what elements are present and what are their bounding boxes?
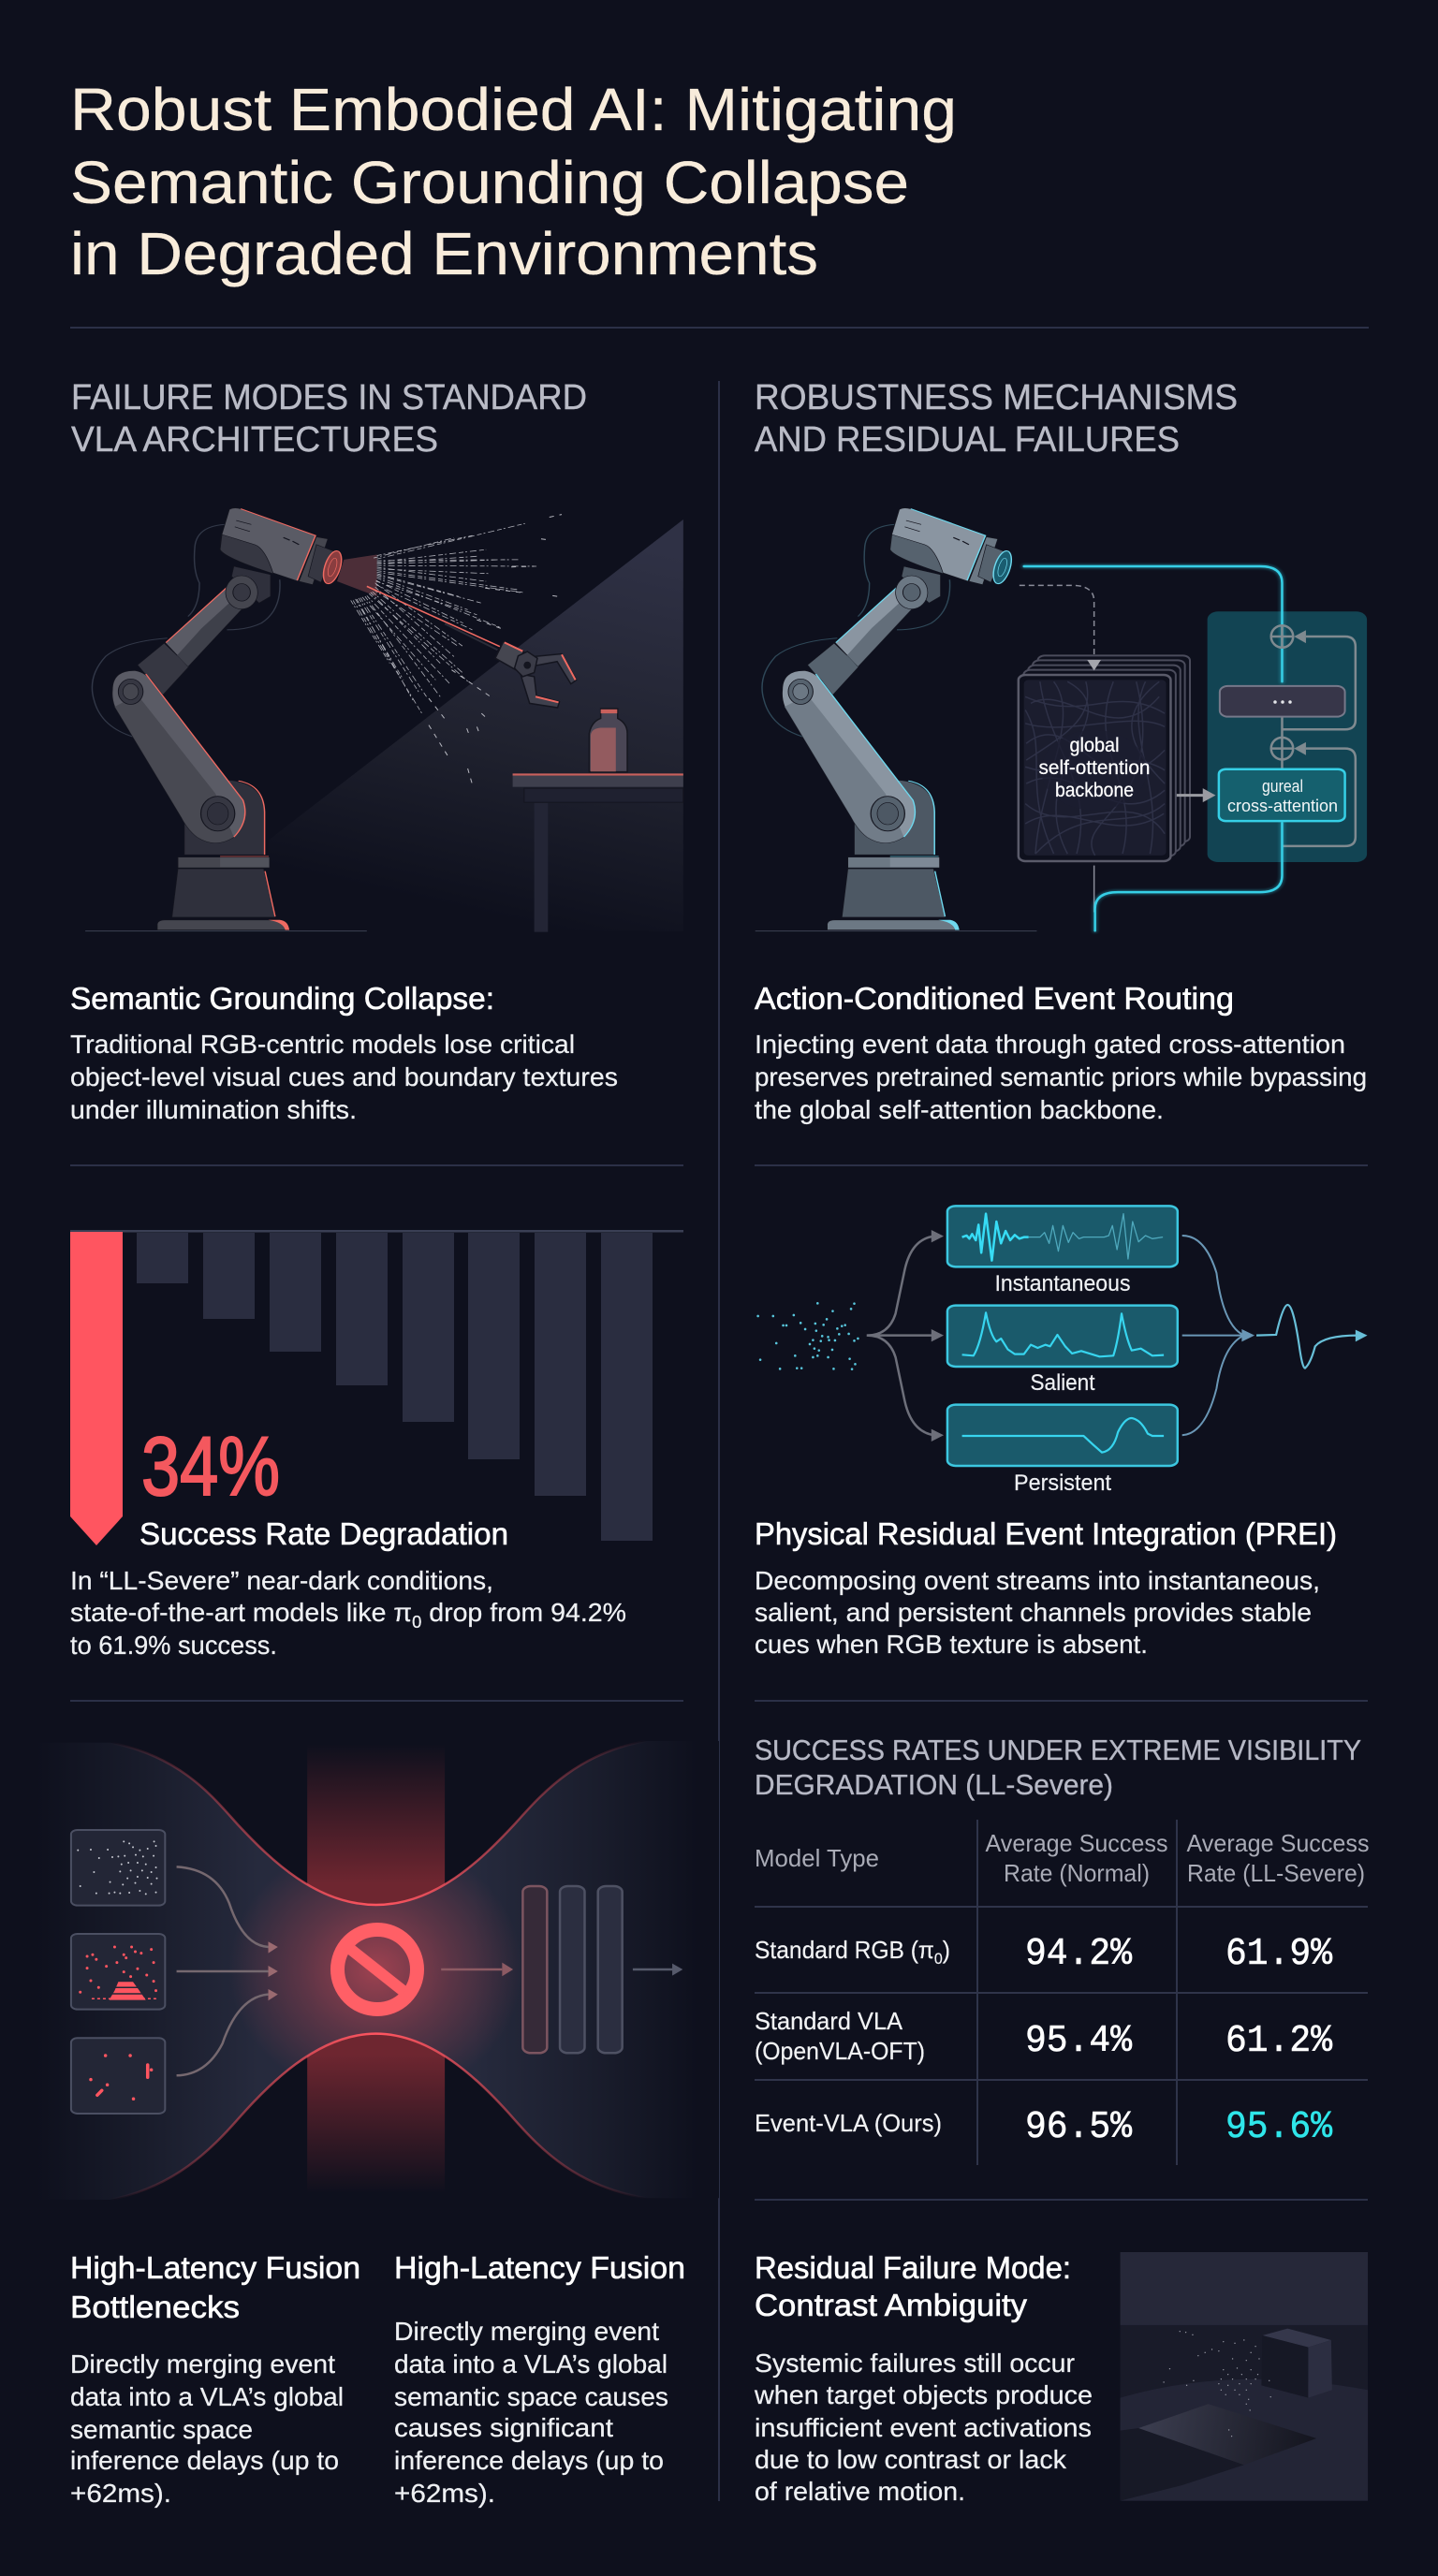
- caption: residual failure mode: Systemic failures still occur: [755, 2349, 1075, 2378]
- table header row: Model Type: [755, 1844, 879, 1872]
- neck shape: [0, 1741, 719, 2200]
- caption: high-latency fusion left: High-Latency Fusion: [70, 2250, 360, 2285]
- title: in Degraded Environments: [70, 220, 818, 287]
- bottle: [589, 709, 627, 772]
- row: standard VLA: Standard VLA: [755, 2007, 903, 2035]
- caption: high-latency fusion right: data into a VLA’s global: [394, 2349, 668, 2378]
- row: standard RGB: [755, 1933, 1332, 1976]
- diagram: event decomposition: [758, 1206, 1368, 1466]
- caption: semantic grounding collapse: [70, 981, 618, 1124]
- table header row: [755, 1829, 1369, 1887]
- red arrow bar: [70, 1232, 123, 1545]
- channel boxes: [947, 1206, 1178, 1466]
- gripper: [495, 641, 577, 708]
- row: event-VLA: 96.5%: [1025, 2106, 1132, 2149]
- panel: failure modes column: [0, 378, 719, 2508]
- caption: residual failure mode: due to low contrast or lack: [755, 2445, 1067, 2474]
- caption: high-latency fusion right: Directly merging event: [394, 2317, 659, 2346]
- caption: success rate degradation: [70, 1516, 626, 1660]
- caption: high-latency fusion left: [70, 2250, 360, 2508]
- faint events: [1164, 2332, 1270, 2437]
- channel labels: Salient: [1030, 1370, 1095, 1396]
- teal gated panel: [1208, 611, 1367, 862]
- caption: action-conditioned event routing: Action-Conditioned Event Routing: [755, 981, 1234, 1016]
- row: standard VLA: 61.2%: [1225, 2020, 1332, 2063]
- caption: residual failure mode: Contrast Ambiguity: [755, 2288, 1028, 2322]
- robot arm: [85, 508, 367, 931]
- caption: PREI: [755, 1516, 1337, 1659]
- arrow: backbone to gate: [1177, 794, 1204, 797]
- icon: blocked sign: [337, 1930, 418, 2009]
- caption: semantic grounding collapse: object-level visual cues and boundary textures: [70, 1062, 618, 1091]
- backbone stack: [1019, 655, 1190, 861]
- input frame: red object events: [71, 1934, 165, 2010]
- row: standard RGB: ): [943, 1936, 950, 1964]
- caption: residual failure mode: when target objects produce: [754, 2380, 1093, 2409]
- gate label: [1227, 776, 1338, 815]
- table heading: [755, 1734, 1361, 1801]
- caption: high-latency fusion left: semantic space: [70, 2415, 253, 2444]
- backbone label: [1039, 735, 1150, 801]
- heading: robustness mechanisms: [755, 378, 1238, 460]
- gate label: cross-attention: [1227, 796, 1338, 815]
- caption: PREI: cues when RGB texture is absent.: [755, 1630, 1148, 1659]
- caption: high-latency fusion left: inference delays (up to: [70, 2446, 339, 2475]
- row: standard RGB: 61.9%: [1225, 1933, 1332, 1976]
- title: [70, 76, 957, 287]
- table: [513, 773, 683, 932]
- caption: success rate degradation: state-of-the-art models like π: [70, 1598, 406, 1627]
- table heading: DEGRADATION (LL-Severe): [755, 1768, 1113, 1801]
- illustration: low-contrast scene: [1121, 2252, 1368, 2501]
- row: standard VLA: 95.4%: [1025, 2020, 1132, 2063]
- caption: success rate degradation: 0: [412, 1613, 421, 1632]
- caption: high-latency fusion left: data into a VLA’s global: [70, 2382, 344, 2411]
- grey degradation bars: [137, 1233, 653, 1541]
- caption: PREI: Physical Residual Event Integration (PREI): [755, 1516, 1337, 1551]
- caption: high-latency fusion right: semantic space causes: [394, 2382, 668, 2411]
- caption: PREI: Decomposing ovent streams into instantaneous,: [755, 1566, 1320, 1595]
- caption: success rate degradation: drop from 94.2%: [421, 1598, 626, 1627]
- caption: semantic grounding collapse: Semantic Grounding Collapse:: [70, 981, 494, 1016]
- caption: high-latency fusion right: causes significant: [394, 2413, 613, 2442]
- channel labels: Persistent: [1014, 1471, 1111, 1496]
- caption: success rate degradation: Success Rate Degradation: [139, 1516, 508, 1551]
- residual feedback lines: [1282, 637, 1356, 846]
- caption: PREI: salient, and persistent channels provides stable: [755, 1598, 1312, 1627]
- caption: high-latency fusion right: +62ms).: [394, 2479, 495, 2508]
- heading: robustness mechanisms: AND RESIDUAL FAILURES: [755, 420, 1180, 460]
- bar chart: success rate degradation: [70, 1230, 683, 1545]
- light cone: [269, 520, 683, 931]
- ellipsis dots: [1275, 700, 1290, 704]
- grey output line: [1093, 866, 1095, 913]
- table header row: Average Success: [985, 1829, 1168, 1857]
- cyan event path: [1024, 566, 1282, 930]
- table header row: Average Success: [1187, 1829, 1369, 1857]
- stat: 34%: 34%: [141, 1419, 280, 1513]
- row: standard RGB: 94.2%: [1025, 1933, 1132, 1976]
- caption: success rate degradation: to 61.9% success.: [70, 1631, 277, 1660]
- dashed RGB path: [1020, 585, 1094, 660]
- input arrows: [867, 1237, 934, 1435]
- channel labels: Instantaneous: [994, 1271, 1131, 1296]
- caption: residual failure mode: Residual Failure Mode:: [755, 2250, 1071, 2285]
- caption: residual failure mode: [754, 2250, 1093, 2506]
- gate label: gureal: [1262, 776, 1303, 796]
- output arrows: [1182, 1236, 1244, 1435]
- red latency band: [307, 1744, 445, 2193]
- flow arrows: [177, 1866, 269, 2075]
- merged signal: [1256, 1305, 1357, 1368]
- backbone label: self-ottention: [1039, 757, 1150, 779]
- table heading: SUCCESS RATES UNDER EXTREME VISIBILITY: [755, 1734, 1361, 1766]
- row: standard RGB: Standard RGB (π: [755, 1936, 945, 1964]
- caption: action-conditioned event routing: Injecting event data through gated cross-attention: [755, 1030, 1345, 1059]
- caption: semantic grounding collapse: under illumination shifts.: [70, 1095, 357, 1124]
- caption: action-conditioned event routing: the global self-attention backbone.: [755, 1095, 1164, 1124]
- table: success rates: [755, 1734, 1369, 2165]
- heading: robustness mechanisms: ROBUSTNESS MECHANISMS: [755, 378, 1238, 417]
- caption: success rate degradation: In “LL-Severe” near-dark conditions,: [70, 1566, 493, 1595]
- table header row: Rate (LL-Severe): [1187, 1859, 1365, 1887]
- caption: semantic grounding collapse: Traditional RGB-centric models lose critical: [70, 1030, 575, 1059]
- caption: high-latency fusion left: Bottlenecks: [70, 2290, 240, 2324]
- gated cross-attention block: [1219, 769, 1345, 821]
- row: event-VLA: Event-VLA (Ours): [755, 2109, 942, 2137]
- row: standard VLA: (OpenVLA-OFT): [755, 2037, 925, 2065]
- backbone label: backbone: [1055, 780, 1134, 801]
- caption: action-conditioned event routing: [755, 981, 1367, 1124]
- row: standard RGB: 0: [934, 1950, 943, 1968]
- row: standard VLA: [755, 2007, 1332, 2065]
- caption: high-latency fusion left: +62ms).: [70, 2479, 171, 2508]
- ellipsis block: [1220, 686, 1345, 717]
- diagram: gated cross-attention routing: [1019, 566, 1367, 930]
- input frame: few events: [71, 2038, 165, 2114]
- heading: failure modes: VLA ARCHITECTURES: [71, 420, 438, 460]
- row: event-VLA: 95.6%: [1225, 2106, 1332, 2149]
- summation nodes: [1271, 625, 1293, 759]
- heading: failure modes: [71, 378, 587, 460]
- output arrow: [441, 1969, 502, 1970]
- channel labels: [994, 1271, 1131, 1496]
- caption: action-conditioned event routing: preserves pretrained semantic priors while bypassing: [755, 1062, 1367, 1091]
- low contrast mat: [1138, 2404, 1316, 2465]
- caption: high-latency fusion left: Directly merging event: [70, 2349, 335, 2378]
- illustration: robot arm with event routing: [756, 508, 1036, 931]
- input frame: sparse events: [71, 1830, 165, 1906]
- waveforms: [962, 1214, 1164, 1453]
- title: Robust Embodied AI: Mitigating: [70, 76, 957, 143]
- diagram: fusion bottleneck: [0, 1741, 719, 2200]
- output layers: [522, 1886, 623, 2053]
- row: event-VLA: [755, 2106, 1332, 2149]
- sensor beam: [337, 515, 562, 787]
- event point cloud: [758, 1303, 858, 1369]
- title: Semantic Grounding Collapse: [70, 149, 909, 216]
- exit arrow: [633, 1969, 673, 1970]
- panel: robustness mechanisms column: [754, 378, 1369, 2506]
- heading: failure modes: FAILURE MODES IN STANDARD: [71, 378, 587, 417]
- illustration: robot arm with failing camera: [85, 508, 683, 932]
- caption: residual failure mode: insufficient event activations: [755, 2413, 1092, 2442]
- caption: high-latency fusion right: inference delays (up to: [394, 2446, 664, 2475]
- caption: high-latency fusion right: High-Latency Fusion: [394, 2250, 685, 2285]
- backbone label: global: [1069, 735, 1120, 756]
- table header row: Rate (Normal): [1004, 1859, 1150, 1887]
- caption: high-latency fusion right: [394, 2250, 685, 2508]
- caption: residual failure mode: of relative motion.: [755, 2477, 965, 2506]
- dark cube: [1261, 2329, 1332, 2398]
